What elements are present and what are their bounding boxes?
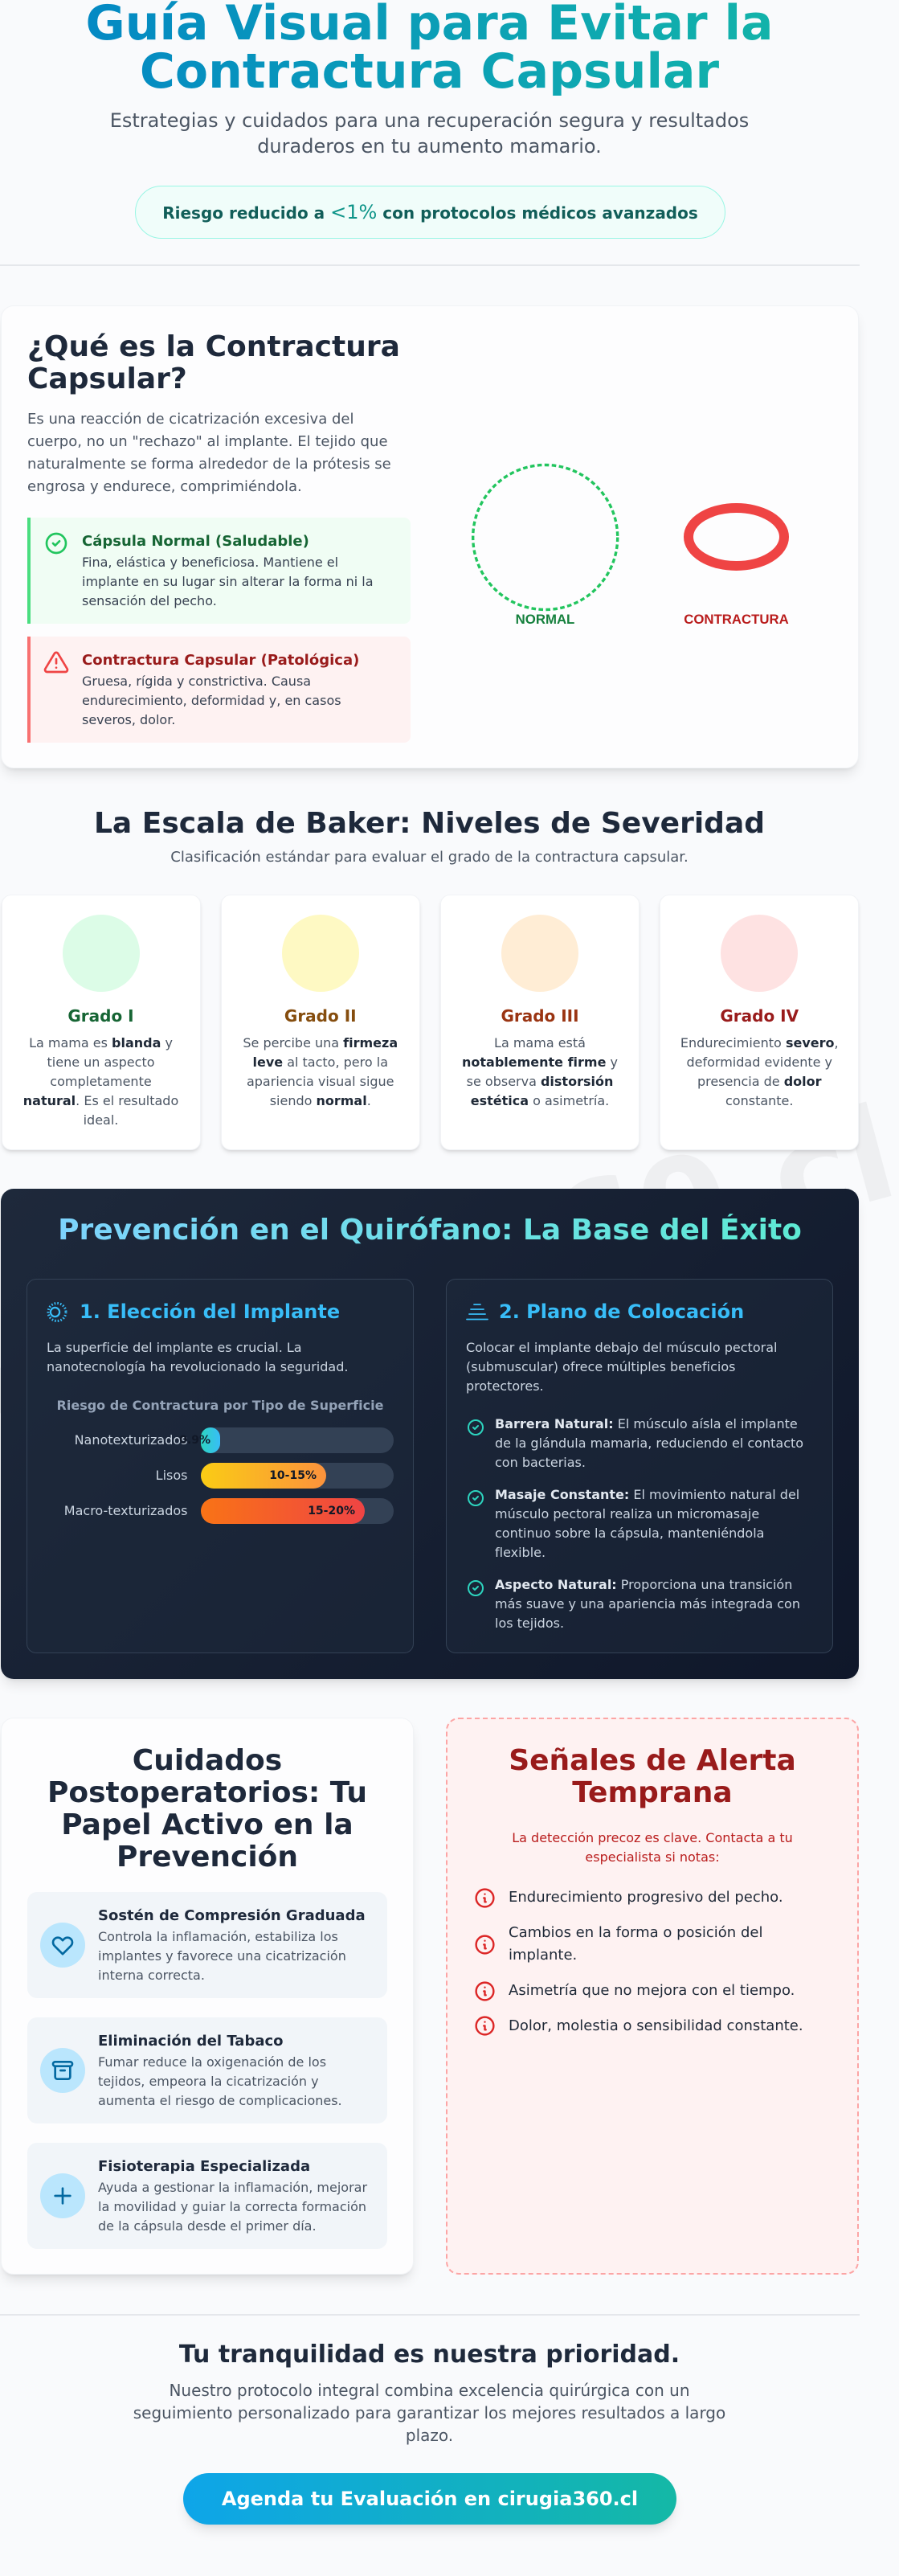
grade I text [23,1035,178,1127]
heading: prevention: Prevención en el Quirófano: La Base del Éxito [58,1214,802,1247]
heading: placement plane: 2. Plano de Colocación [499,1300,744,1323]
physiotherapy text: de la cápsula desde el primer día. [98,2218,317,2234]
grade III text: La mama está [494,1035,586,1050]
benefit: natural barrier [495,1416,803,1470]
tobacco text: aumenta el riesgo de complicaciones. [98,2093,342,2108]
physiotherapy text: la movilidad y guiar la correcta formación [98,2199,366,2214]
intro paragraph: naturalmente se forma alrededor de la prótesis se [27,456,391,473]
physiotherapy title: Fisioterapia Especializada [98,2158,310,2175]
icon: archive box [40,2048,85,2093]
bar: smooth: 10-15% [269,1469,317,1482]
grade IV text: Endurecimiento severo, [680,1035,839,1050]
grade I text: ideal. [84,1112,118,1127]
grade IV circle [721,915,798,992]
grade III circle [501,915,578,992]
tobacco text: Fumar reduce la oxigenación de los [98,2054,326,2070]
grade I text: completamente [50,1074,152,1088]
grade II text [243,1035,398,1108]
grade IV text: deformidad evidente y [686,1055,832,1069]
bar: nano [201,1427,394,1453]
grade II title: Grado II [284,1006,357,1026]
benefit: constant massage: Masaje Constante: El movimiento natural del [495,1487,799,1502]
icon: info 4 [475,2016,495,2036]
icon: info 3 [475,1981,495,2001]
placement text [466,1340,777,1394]
panel: warning signs [446,1718,859,2275]
grade II text: leve al tacto, pero la [252,1055,388,1069]
icon: plus [40,2173,85,2218]
heading: implant choice: 1. Elección del Implante [80,1300,340,1323]
heading: post-op care: Cuidados [133,1744,282,1777]
icon: check 2 [468,1490,484,1506]
normal description: sensación del pecho. [82,593,217,608]
bar chart: contracture risk [64,1427,394,1524]
benefit: natural barrier: de la glándula mamaria, reduciendo el contacto [495,1435,803,1451]
grade III text: estética o asimetría. [471,1093,609,1108]
grade III title: Grado III [501,1006,579,1026]
normal description [82,555,373,608]
bar: macro: 15-20% [308,1505,355,1517]
grade IV text: constante. [725,1093,793,1108]
intro paragraph [27,411,391,495]
icon: heart [40,1923,85,1968]
contracted capsule [684,508,789,627]
icon: check 3 [468,1580,484,1596]
sign: asymmetry: Asimetría que no mejora con el tiempo. [509,1982,795,1999]
icon: layers [466,1304,488,1320]
pathological description: endurecimiento, deformidad y, en casos [82,693,341,708]
heading: Baker scale: La Escala de Baker: Niveles de Severidad [94,807,765,840]
benefit: natural look: Aspecto Natural: Proporciona una transición [495,1577,792,1592]
grade II text: apariencia visual sigue [247,1074,394,1088]
pathological description: severos, dolor. [82,712,175,727]
physiotherapy text: Ayuda a gestionar la inflamación, mejorar [98,2180,367,2195]
sign: shape change [509,1924,762,1964]
warning intro [512,1829,793,1865]
warning intro: especialista si notas: [585,1849,720,1865]
risk pill [135,186,725,239]
footer text: Nuestro protocolo integral combina excelencia quirúrgica con un [169,2381,690,2400]
grade III text: se observa distorsión [467,1074,613,1088]
card: grade III [440,895,640,1150]
benefit: constant massage: continuo sobre la cápsula, manteniéndola [495,1526,764,1541]
intro paragraph: cuerpo, no un "rechazo" al implante. El tejido que [27,433,388,450]
heading: post-op care: Prevención [116,1841,298,1874]
care item: physiotherapy [27,2143,387,2249]
normal title: Cápsula Normal (Saludable) [82,533,309,550]
benefit: natural look [495,1577,800,1631]
heading: post-op care [47,1744,367,1874]
grade IV text [680,1035,839,1108]
tobacco text: tejidos, empeora la cicatrización y [98,2074,319,2089]
grade II text: Se percibe una firmeza [243,1035,398,1050]
subtitle: Estrategias y cuidados para una recuperación segura y resultados [110,109,749,132]
title [0,0,859,96]
bar label: nano: Nanotexturizados [75,1432,188,1448]
normal capsule [473,465,618,627]
bar label: macro: Macro-texturizados [64,1503,188,1518]
contracted capsule: CONTRACTURA [684,612,789,627]
panel: placement plane [446,1279,833,1653]
grade II circle [282,915,359,992]
footer text: plazo. [406,2426,453,2445]
implant text [47,1340,348,1374]
benefit: natural look: los tejidos. [495,1616,564,1631]
bar chart: contracture risk: 0.9% [179,1434,210,1447]
footer heading: Tu tranquilidad es nuestra prioridad. [179,2341,680,2369]
pathological title: Contractura Capsular (Patológica) [82,652,359,669]
call to action button [183,2473,676,2525]
card: grade IV [660,895,859,1150]
placement text: (submuscular) ofrece múltiples beneficios [466,1359,735,1374]
subtitle: duraderos en tu aumento mamario. [257,135,602,158]
panel: implant choice [27,1279,414,1653]
grade I text: natural. Es el resultado [23,1093,178,1108]
compression text [98,1929,346,1983]
callout: pathological contracture [27,637,411,743]
heading: post-op care: Postoperatorios: Tu [47,1776,367,1809]
callout: normal capsule [27,518,411,624]
implant text: nanotecnología ha revolucionado la seguridad. [47,1359,348,1374]
title: Contractura Capsular [140,43,719,100]
sign: pain: Dolor, molestia o sensibilidad constante. [509,2017,803,2034]
grade I text: La mama es blanda y [29,1035,173,1050]
panel: post-op care [1,1718,414,2275]
heading: what is: ¿Qué es la Contractura [27,330,400,363]
benefit: natural barrier: Barrera Natural: El músculo aísla el implante [495,1416,798,1431]
intro paragraph: Es una reacción de cicatrización excesiva del [27,411,353,428]
heading: warning signs: Temprana [572,1776,733,1809]
call to action button: Agenda tu Evaluación en cirugia360.cl [222,2488,638,2510]
benefit: constant massage: flexible. [495,1545,546,1560]
chart title: Riesgo de Contractura por Tipo de Superficie [57,1398,383,1413]
grade III text: notablemente firme y [462,1055,618,1069]
normal description: Fina, elástica y beneficiosa. Mantiene el [82,555,338,570]
bar: smooth [201,1463,394,1489]
grade IV title: Grado IV [720,1006,799,1026]
grade IV text: presencia de dolor [697,1074,822,1088]
sign: shape change: implante. [509,1947,577,1964]
pathological description [82,674,341,727]
normal description: implante en su lugar sin alterar la forma ni la [82,574,373,589]
benefit: natural barrier: con bacterias. [495,1455,586,1470]
compression title: Sostén de Compresión Graduada [98,1907,366,1924]
pill text: Riesgo reducido a <1% con protocolos médicos avanzados [162,201,698,223]
heading: warning signs: Señales de Alerta [509,1744,796,1777]
icon: info 2 [475,1935,495,1955]
Baker subtitle: Clasificación estándar para evaluar el grado de la contractura capsular. [170,849,689,866]
footer text: seguimiento personalizado para garantizar los mejores resultados a largo [133,2403,725,2422]
benefit: constant massage: músculo pectoral realiza un micromasaje [495,1506,759,1521]
bar label: smooth: Lisos [156,1468,188,1483]
grade I circle [63,915,140,992]
tobacco text [98,2054,342,2108]
implant text: La superficie del implante es crucial. La [47,1340,302,1355]
panel: prevention in the operating room [1,1189,859,1679]
panel: what is capsular contracture [1,305,859,768]
heading: what is [27,330,400,395]
heading: warning signs [509,1744,796,1809]
grade I title: Grado I [67,1006,134,1026]
normal capsule: NORMAL [516,612,574,627]
benefit: constant massage [495,1487,799,1560]
warning intro: La detección precoz es clave. Contacta a tu [512,1829,793,1845]
intro paragraph: engrosa y endurece, comprimiéndola. [27,478,302,495]
compression text: implantes y favorece una cicatrización [98,1948,346,1964]
sign: hardening: Endurecimiento progresivo del pecho. [509,1889,783,1906]
icon: check circle [45,532,67,555]
placement text: protectores. [466,1378,544,1394]
icon: warning triangle [43,651,69,674]
card: grade I [2,895,201,1150]
care item: tobacco [27,2017,387,2123]
tobacco title: Eliminación del Tabaco [98,2033,284,2050]
physiotherapy text [98,2180,368,2234]
pathological description: Gruesa, rígida y constrictiva. Causa [82,674,311,689]
compression text: Controla la inflamación, estabiliza los [98,1929,338,1944]
icon: check 1 [468,1419,484,1435]
sign: shape change: Cambios en la forma o posición del [509,1924,762,1941]
heading: what is: Capsular? [27,362,187,395]
icon: info 1 [475,1888,495,1908]
benefit: natural look: más suave y una apariencia más integrada con [495,1596,800,1612]
diagram: normal vs contracture [472,463,789,627]
icon: implant surface [47,1302,67,1322]
care item: compression [27,1892,387,1998]
grade III text [462,1035,618,1108]
compression text: interna correcta. [98,1968,205,1983]
card: grade II [221,895,420,1150]
subtitle [110,109,749,158]
footer text [133,2381,725,2445]
grade I text: tiene un aspecto [47,1055,154,1069]
grade II text: siendo normal. [270,1093,371,1108]
heading: post-op care: Papel Activo en la [61,1808,353,1841]
bar: macro [201,1498,394,1524]
placement text: Colocar el implante debajo del músculo pectoral [466,1340,777,1355]
